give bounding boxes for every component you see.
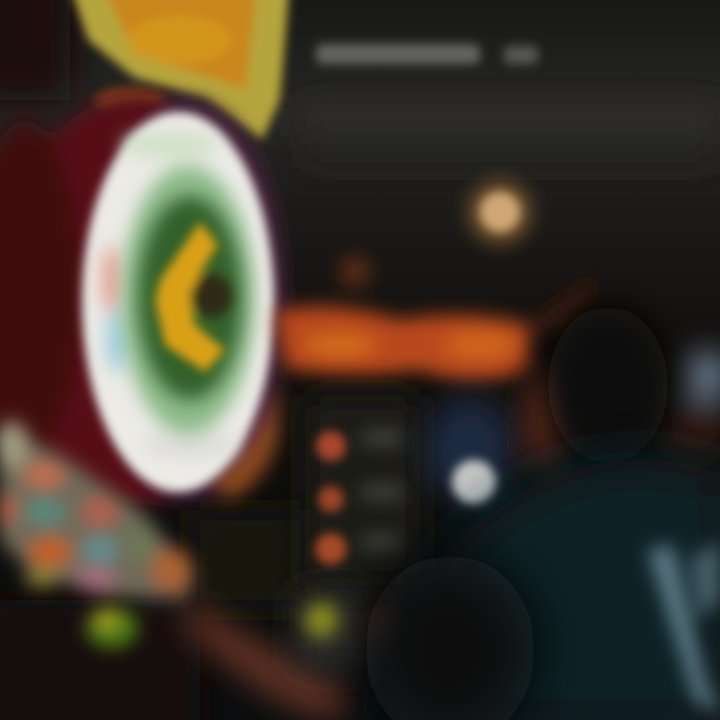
wheel: yellow C emblem <box>155 222 232 372</box>
bottom yellow marker and panel foot <box>295 590 399 670</box>
orange neon lettering <box>275 256 598 381</box>
person: shirt logo <box>648 540 720 715</box>
glowing lamp <box>468 180 532 244</box>
menu panel <box>305 395 420 585</box>
person: head <box>548 307 668 463</box>
colourful tiles, bottom left <box>0 421 195 600</box>
wheel rim: maroon <box>0 95 285 505</box>
wheel: dark green centre <box>138 196 242 400</box>
person: dark hair shadow on shoulder <box>365 555 535 720</box>
wheel: white ring <box>82 112 274 492</box>
sign: yellow top shape <box>68 0 290 140</box>
blue screen with white dot <box>426 398 514 504</box>
wheel <box>0 95 285 505</box>
person silhouette <box>365 307 720 720</box>
forearm <box>185 600 350 720</box>
menu item markers <box>315 431 347 565</box>
dark left edge and lower left corner <box>0 0 310 720</box>
wheel: coloured edge marks <box>102 132 238 457</box>
green yellow marker, bottom left <box>86 608 138 648</box>
ceiling bands <box>300 105 720 162</box>
background person cap <box>660 351 720 460</box>
person: teal shirt <box>390 459 720 720</box>
heading placeholder: blurred title <box>316 44 538 64</box>
wheel: pale green band <box>122 165 254 435</box>
red glow beside person <box>525 370 565 470</box>
menu item text lines <box>362 432 402 548</box>
